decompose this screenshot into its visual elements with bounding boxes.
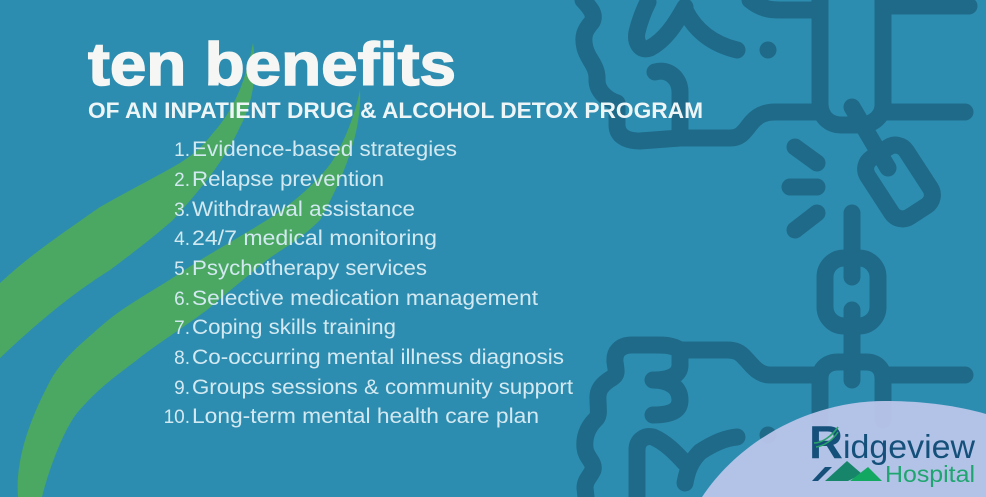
list item 6: 6. xyxy=(174,289,190,310)
logo mountains xyxy=(812,461,882,481)
list item 1: Evidence-based strategies xyxy=(192,138,457,161)
break sparks xyxy=(790,147,817,230)
logo wordmark: Hospital: Hospital xyxy=(885,461,975,487)
illustration: chained hands breaking free xyxy=(583,0,969,497)
logo badge background xyxy=(702,401,986,497)
top fist and cuff xyxy=(583,0,969,141)
icon: dot on bottom hand xyxy=(760,426,776,444)
logo wordmark: Ridgeview: R xyxy=(809,416,843,468)
list item 10: 10. xyxy=(164,407,190,428)
list item 10: Long-term mental health care plan xyxy=(192,405,539,428)
logo wordmark: Ridgeview xyxy=(809,416,975,468)
subtitle: OF AN INPATIENT DRUG & ALCOHOL DETOX PROGRAM xyxy=(88,98,703,123)
logo: Ridgeview Hospital xyxy=(809,416,975,487)
list item 9: 9. xyxy=(174,378,190,399)
list item 2: Relapse prevention xyxy=(192,168,384,191)
logo wordmark: Ridgeview: idgeview xyxy=(843,428,975,465)
list item 9: Groups sessions & community support xyxy=(192,376,573,399)
list item 3: 3. xyxy=(174,200,190,221)
list item 1: 1. xyxy=(174,140,190,161)
broken chain link xyxy=(852,107,937,224)
title: ten benefits xyxy=(88,31,456,98)
list item 8: Co-occurring mental illness diagnosis xyxy=(192,346,564,369)
list item 7: 7. xyxy=(174,318,190,339)
green leaf swooshes xyxy=(0,43,360,497)
list item 3: Withdrawal assistance xyxy=(192,198,415,221)
numbered benefits list xyxy=(164,138,573,428)
list item 7: Coping skills training xyxy=(192,316,396,339)
list item 4: 4. xyxy=(174,229,190,250)
icon: dot on top hand xyxy=(760,42,776,58)
list item 5: Psychotherapy services xyxy=(192,257,427,280)
bottom fist and cuff xyxy=(585,345,965,497)
list item 8: 8. xyxy=(174,348,190,369)
logo swoosh on R xyxy=(814,427,838,447)
lower chain xyxy=(825,213,878,380)
list item 4: 24/7 medical monitoring xyxy=(192,227,437,250)
list item 6: Selective medication management xyxy=(192,287,538,310)
list item 5: 5. xyxy=(174,259,190,280)
list item 2: 2. xyxy=(174,170,190,191)
